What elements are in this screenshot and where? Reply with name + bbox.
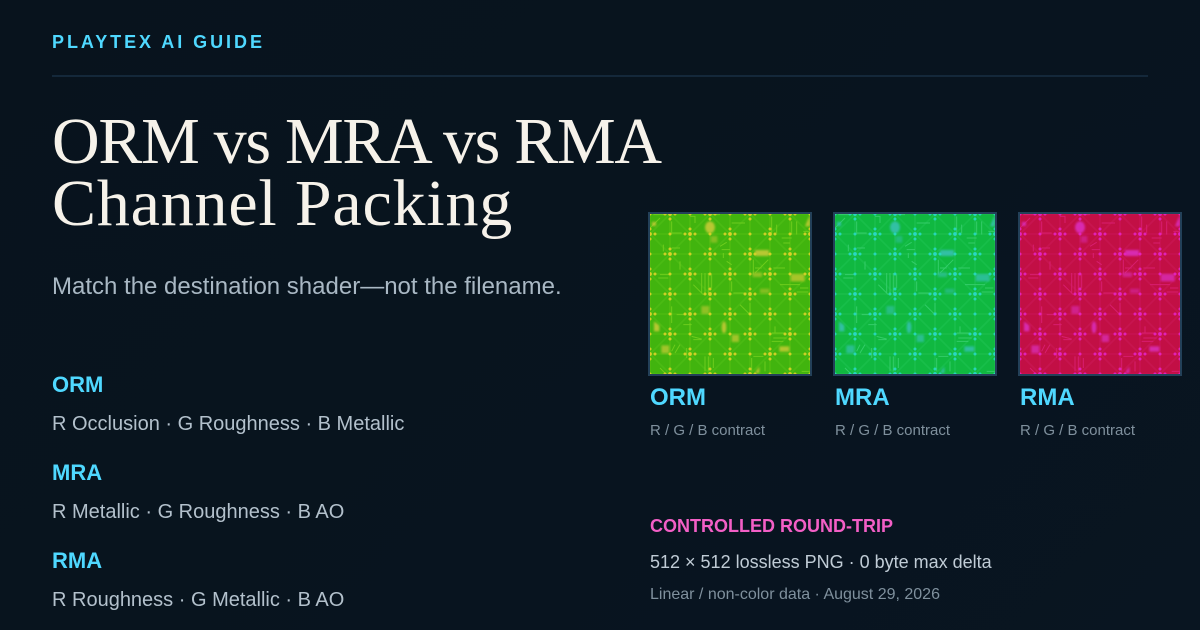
texture swatch: RMA: [1018, 212, 1182, 376]
title: ORM vs MRA vs RMA: [52, 105, 661, 178]
label: RMA: RMA: [1020, 384, 1075, 411]
caption: ORM contract: R / G / B contract: [650, 422, 765, 439]
label: ORM: ORM: [650, 384, 706, 411]
texture swatch: MRA: [833, 212, 997, 376]
text: RMA channels: R Roughness · G Metallic · B AO: [52, 589, 344, 611]
label: MRA: MRA: [835, 384, 890, 411]
text: data type and date: Linear / non-color data · August 29, 2026: [650, 586, 940, 603]
text: test spec: 512 × 512 lossless PNG · 0 byte max delta: [650, 552, 992, 572]
texture swatch: ORM: [648, 212, 812, 376]
heading: controlled round-trip: CONTROLLED ROUND-TRIP: [650, 516, 893, 536]
heading: RMA: RMA: [52, 548, 102, 573]
panel: RMA swatch card: [1018, 212, 1182, 439]
caption: MRA contract: R / G / B contract: [835, 422, 950, 439]
eyebrow: Playtex AI Guide: PLAYTEX AI GUIDE: [52, 32, 265, 52]
heading: MRA: MRA: [52, 460, 102, 485]
panel: MRA swatch card: [833, 212, 997, 439]
title: Channel Packing: [52, 166, 513, 240]
title: [52, 105, 662, 240]
heading: ORM: ORM: [52, 372, 103, 397]
text: ORM channels: R Occlusion · G Roughness · B Metallic: [52, 413, 404, 435]
caption: RMA contract: R / G / B contract: [1020, 422, 1135, 439]
panel: ORM swatch card: [648, 212, 812, 439]
text: MRA channels: R Metallic · G Roughness · B AO: [52, 501, 344, 523]
panel: channel order list: [52, 372, 404, 611]
subtitle: Match the destination shader—not the filename.: [52, 273, 562, 300]
